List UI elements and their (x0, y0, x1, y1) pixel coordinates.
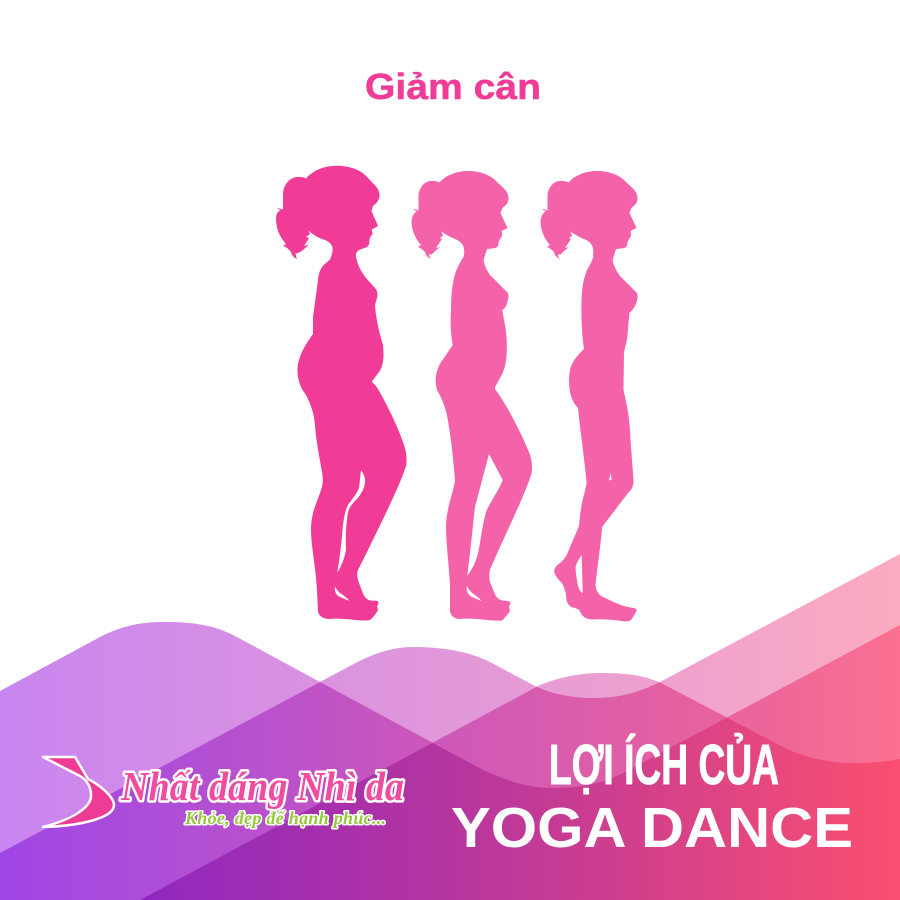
title: Giảm cân (365, 66, 541, 107)
logo (43, 757, 404, 828)
heading: yoga dance: YOGA DANCE (451, 797, 853, 860)
heading: benefits of: LỢI ÍCH CỦA (549, 732, 779, 797)
icon: logo swoosh (43, 757, 114, 827)
silhouette: slimmer woman (412, 171, 532, 621)
logo tagline: Khỏe, đẹp để hạnh phúc... (184, 808, 386, 828)
silhouette: slim woman (540, 171, 638, 621)
wave background (0, 554, 900, 900)
silhouette: overweight woman (276, 166, 407, 620)
logo name: Nhất dáng Nhì da (120, 763, 404, 809)
